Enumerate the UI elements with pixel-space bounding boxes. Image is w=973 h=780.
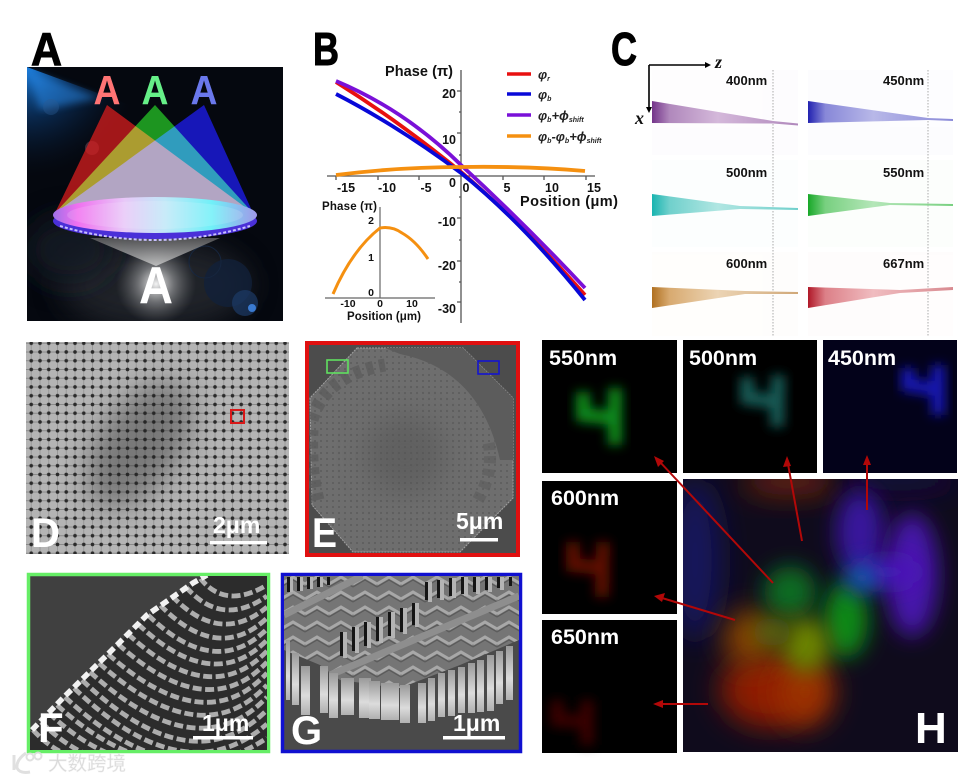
- cone 667nm: [808, 287, 953, 308]
- image 550nm: 550nm: [549, 346, 617, 370]
- legend: +ϕ: [569, 129, 587, 144]
- panel D: SEM array: [26, 342, 289, 556]
- axis arrows z and x: x: [634, 108, 644, 128]
- y tick labels: 0: [449, 176, 456, 190]
- green frame and background: [28, 574, 268, 752]
- axis arrows z and x: [634, 52, 722, 128]
- curve: phi b: [336, 94, 585, 300]
- blue frame and floor: [282, 574, 520, 752]
- label D: D: [31, 509, 60, 556]
- white letter A: A: [139, 257, 173, 315]
- legend: φ: [538, 87, 547, 102]
- x tick labels: 15: [587, 181, 601, 195]
- white glow: [120, 256, 192, 320]
- y tick labels: -20: [438, 259, 456, 273]
- inset plot: Phase (π): [322, 201, 377, 213]
- legend: +ϕ: [551, 108, 569, 123]
- legend: b: [565, 138, 570, 145]
- composite image: H: [915, 704, 947, 753]
- panel F: nanofin top view: [28, 574, 268, 765]
- legend: b: [547, 117, 552, 124]
- x tick labels: -15: [337, 181, 355, 195]
- blue letter A: A: [190, 67, 218, 113]
- x tick labels: 0: [463, 181, 470, 195]
- x tick labels: -10: [378, 181, 396, 195]
- label B: B: [313, 23, 339, 75]
- inset plot: 1: [368, 252, 374, 264]
- legend: shift: [587, 138, 602, 145]
- cone 500nm: [652, 194, 798, 216]
- image 600nm: 600nm: [551, 486, 619, 510]
- scale bar and text: 2μm: [213, 512, 260, 538]
- panel B: phase plot: [313, 23, 618, 323]
- metalens disc: [53, 197, 257, 240]
- legend: φ: [538, 129, 547, 144]
- wavelength labels: [726, 73, 924, 271]
- legend: b: [547, 96, 552, 103]
- octagonal lens: [310, 348, 513, 552]
- red marker: [231, 410, 244, 423]
- nanofin pattern: [30, 575, 267, 765]
- tinted backgrounds: [652, 70, 953, 336]
- inset plot: 0: [377, 298, 383, 310]
- red letter A: A: [94, 67, 120, 113]
- scale bar and text: [443, 710, 505, 740]
- panel C: focal simulations: [611, 23, 953, 337]
- label A: A: [31, 23, 62, 75]
- composite image: [669, 468, 960, 753]
- y tick labels: 20: [442, 87, 456, 101]
- legend: -φ: [551, 129, 565, 144]
- wavelength labels: 550nm: [883, 165, 924, 180]
- inset plot: Position (μm): [347, 311, 421, 323]
- image 550nm: [542, 340, 677, 473]
- image 650nm: 650nm: [551, 625, 619, 649]
- diagonal ridges: [284, 576, 519, 675]
- image 650nm: [542, 620, 677, 753]
- inset plot: 0: [368, 287, 374, 299]
- wavelength labels: 400nm: [726, 73, 767, 88]
- green letter A: A: [142, 67, 168, 113]
- legend: φ: [538, 67, 547, 82]
- cone 550nm: [808, 194, 953, 216]
- cone 600nm: [652, 287, 798, 308]
- inset plot: -10: [340, 298, 356, 310]
- scale bar and text: 1μm: [202, 710, 249, 736]
- scale bar and text: [193, 710, 253, 740]
- dark central shading: [66, 363, 214, 527]
- arrows to wavelength images: [653, 455, 871, 708]
- x tick labels: 5: [504, 181, 511, 195]
- main axes: [327, 70, 595, 323]
- pillar grid: [26, 342, 289, 554]
- watermark: [14, 747, 126, 776]
- dark background: [27, 67, 283, 321]
- pillars: [286, 640, 513, 723]
- label G: G: [291, 709, 322, 753]
- scale bar and text: 1μm: [453, 710, 500, 736]
- blue marker: [478, 361, 499, 374]
- inset plot: [322, 201, 435, 323]
- x tick labels: -5: [420, 181, 432, 195]
- chevron top surface: [284, 576, 519, 688]
- x tick labels: 10: [545, 181, 559, 195]
- x-axis title: Position (μm): [520, 194, 618, 210]
- inset plot: 2: [368, 215, 374, 227]
- panel E: single metalens SEM: [307, 343, 518, 556]
- scale bar and text: [210, 512, 267, 544]
- legend: r: [547, 76, 551, 83]
- image 600nm: [542, 481, 677, 614]
- label E: E: [312, 509, 337, 556]
- wavelength labels: 667nm: [883, 256, 924, 271]
- lower focusing cone: [90, 238, 220, 266]
- watermark: 大数跨境: [48, 747, 126, 776]
- panel A: metalens achromatic imaging illustration: [25, 23, 283, 330]
- y-axis title: Phase (π): [385, 64, 453, 80]
- image 450nm: [823, 340, 957, 473]
- axis arrows z and x: z: [714, 52, 722, 72]
- legend: [507, 67, 602, 145]
- scale bar and text: 5μm: [456, 508, 503, 534]
- wavelength labels: 450nm: [883, 73, 924, 88]
- curve: phi r: [336, 82, 585, 295]
- label C: C: [611, 23, 637, 75]
- red frame and background: [307, 343, 518, 555]
- y tick labels: -30: [438, 302, 456, 316]
- curve: phi b + shift: [336, 81, 585, 288]
- legend: shift: [569, 117, 584, 124]
- legend: b: [547, 138, 552, 145]
- inset plot: 10: [406, 298, 418, 310]
- curve: orange difference: [336, 167, 585, 175]
- x tick labels: [337, 181, 601, 195]
- upper-right band and inner disc: [312, 348, 513, 500]
- image 500nm: [683, 340, 817, 473]
- legend: φ: [538, 108, 547, 123]
- wavelength labels: 600nm: [726, 256, 767, 271]
- dark slits: [287, 577, 512, 656]
- light effects: [25, 67, 258, 330]
- label F: F: [38, 704, 64, 751]
- image 500nm: 500nm: [689, 346, 757, 370]
- dotted focal lines: [773, 70, 928, 337]
- wavelength labels: 500nm: [726, 165, 767, 180]
- y tick labels: -10: [438, 215, 456, 229]
- panel G: nanofin tilted view: [282, 574, 520, 753]
- wall fins: [290, 577, 504, 658]
- panel H: imaging results: [542, 340, 960, 753]
- y tick labels: [438, 87, 456, 316]
- coloured light cones: [55, 105, 253, 213]
- image 450nm: 450nm: [828, 346, 896, 370]
- y tick labels: 10: [442, 133, 456, 147]
- cone 450nm: [808, 101, 953, 123]
- green marker: [327, 360, 348, 373]
- cone 400nm: [652, 101, 798, 126]
